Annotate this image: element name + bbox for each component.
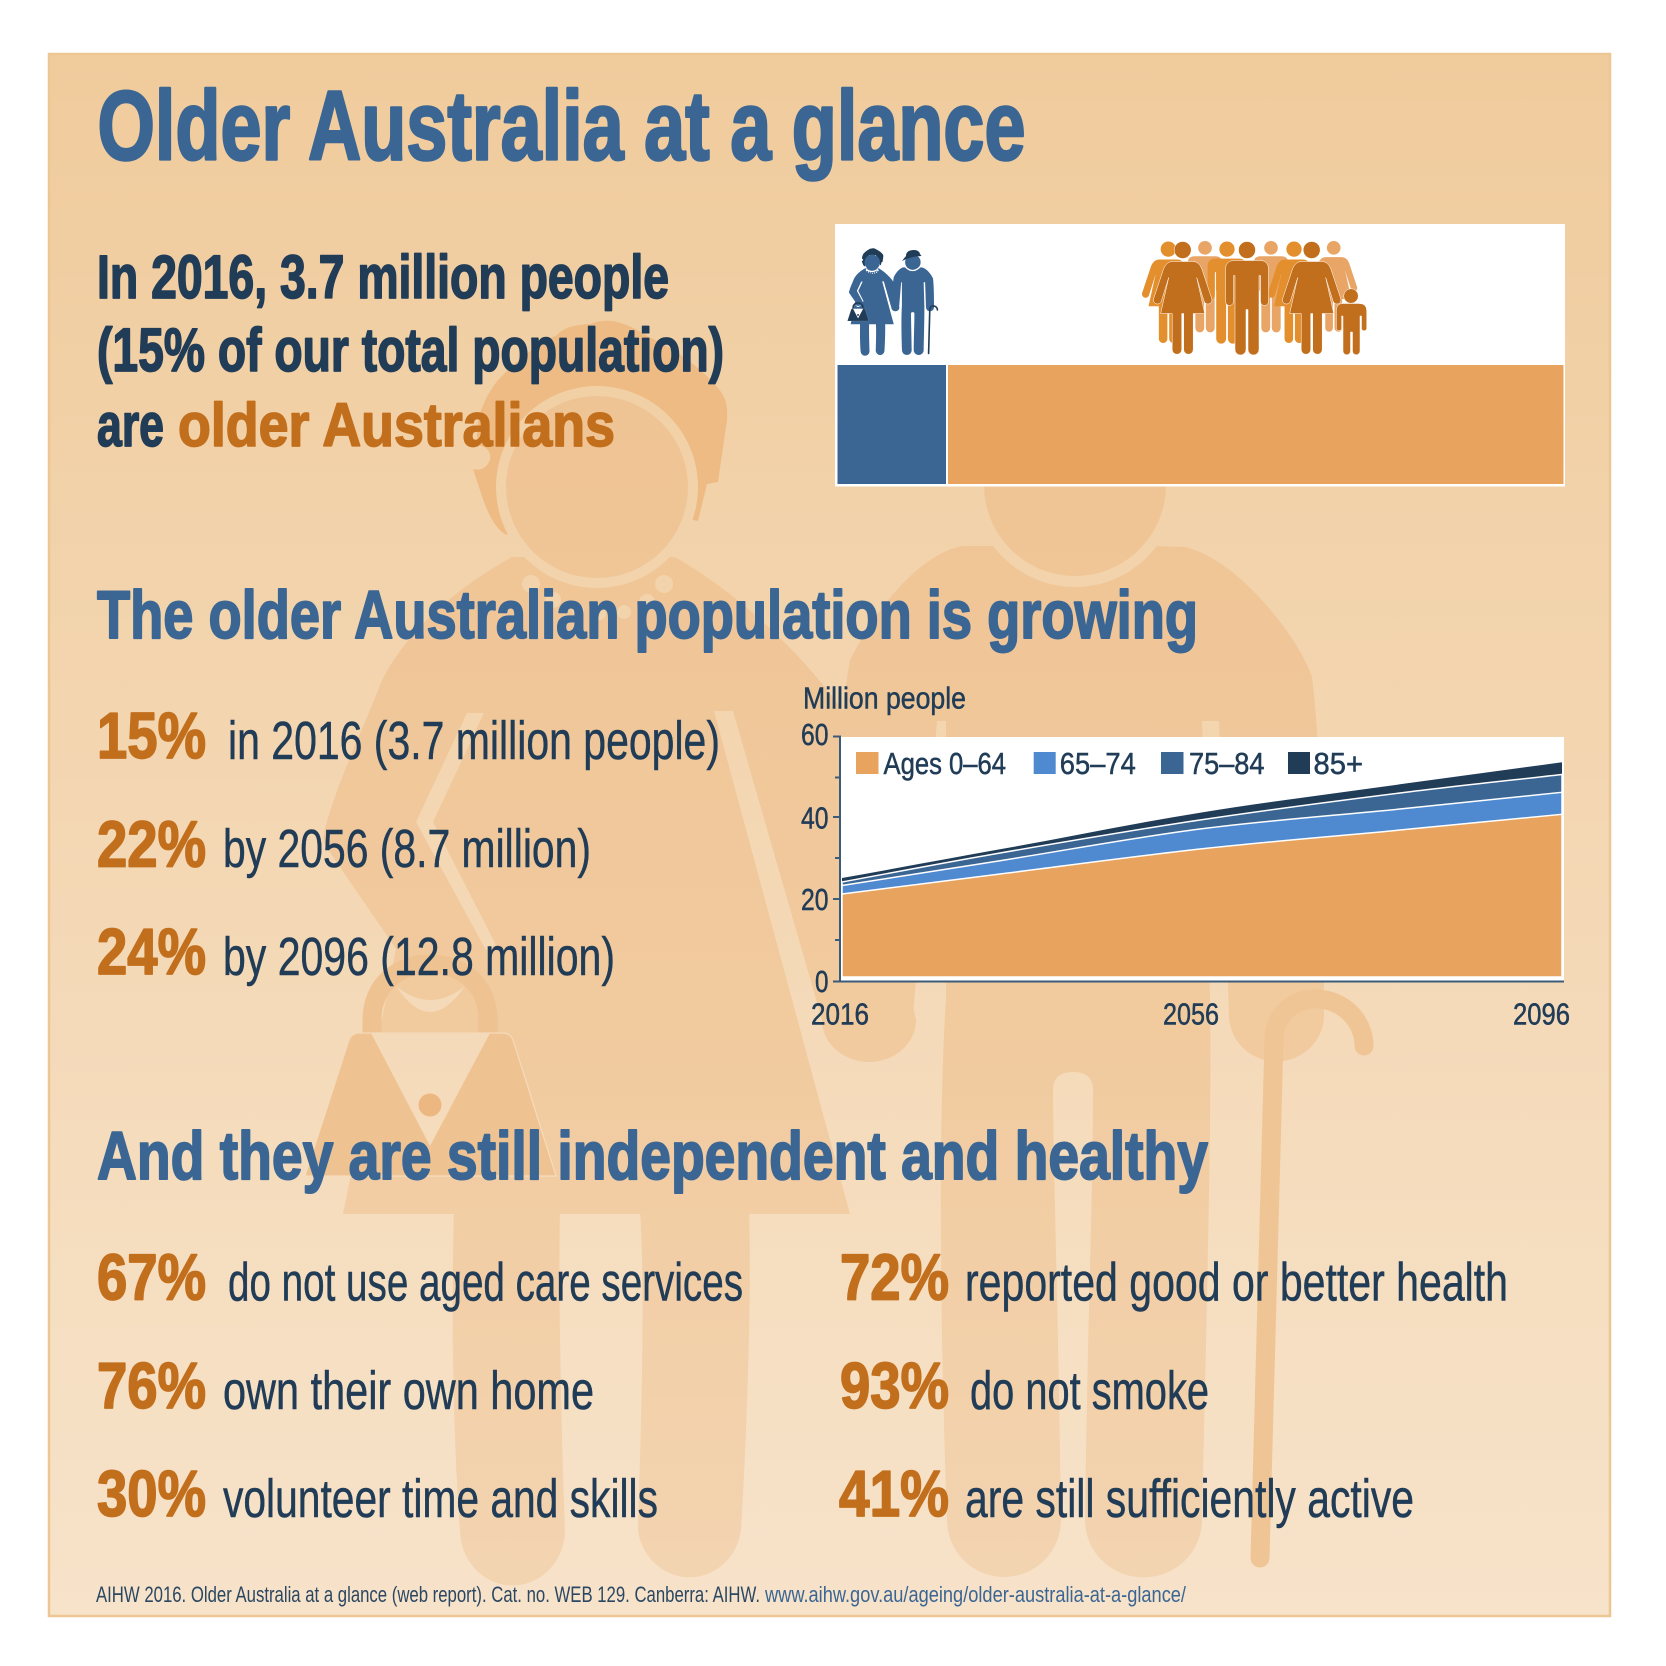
woman hair: [473, 321, 727, 535]
stat 22%: by 2056 (8.7 million): [223, 819, 591, 879]
stat 30%: 30%: [97, 1457, 206, 1530]
y-axis labels: 0: [815, 964, 828, 999]
man body: [833, 546, 1324, 1577]
stat 41%: [839, 1457, 1414, 1530]
woman head: [506, 396, 688, 578]
stat 72%: 72%: [840, 1240, 949, 1314]
stat 93%: do not smoke: [970, 1361, 1209, 1421]
growth statistics: [97, 699, 720, 988]
chart legend: Ages 0–64: [884, 746, 1006, 781]
stat 67%: do not use aged care services: [228, 1252, 743, 1312]
stat 24%: 24%: [97, 915, 206, 988]
chart plot background: [840, 737, 1564, 981]
stat 76%: own their own home: [223, 1361, 594, 1421]
woman legs: [453, 1210, 750, 1586]
y-axis labels: 20: [801, 882, 828, 917]
necklace beads: [522, 575, 673, 620]
handbag inner crescent: [396, 986, 465, 1012]
x-axis labels: 2016: [811, 996, 869, 1032]
chart legend: [856, 746, 1363, 781]
background silhouette: older couple: [305, 321, 1364, 1586]
stat 22%: [97, 808, 591, 880]
stat 67%: [97, 1240, 743, 1314]
stat 93%: [840, 1349, 1209, 1422]
heading: independent and healthy: And they are still independent and healthy: [97, 1118, 1208, 1194]
stat 76%: 76%: [97, 1349, 206, 1422]
older Australians bar: [838, 365, 946, 484]
stat 41%: 41%: [839, 1457, 949, 1530]
stat 30%: volunteer time and skills: [223, 1469, 658, 1529]
source footer: www.aihw.gov.au/ageing/older-australia-at-a-glance/: [764, 1582, 1187, 1607]
woman neck ring: [496, 386, 698, 588]
intro line 1: In 2016, 3.7 million people: [97, 243, 669, 311]
x-axis labels: 2096: [1513, 996, 1570, 1032]
x-axis labels: 2056: [1163, 996, 1219, 1032]
health statistics, right column: [839, 1240, 1508, 1530]
area: ages 0 to 64: [842, 814, 1562, 977]
stat 24%: by 2096 (12.8 million): [223, 927, 615, 987]
y-axis labels: 60: [801, 717, 828, 752]
woman inner arm gap: [416, 713, 496, 950]
child figure: [1336, 289, 1367, 355]
stat 24%: [97, 915, 615, 988]
man collar ring: [973, 383, 1177, 587]
handbag clasp: [418, 1094, 442, 1116]
intro statement: [97, 243, 724, 459]
icon: crowd of people: [1142, 241, 1367, 355]
handbag: [305, 1033, 556, 1176]
walking cane: [1260, 999, 1364, 1558]
handbag handle: [372, 964, 488, 1036]
woman dress and arm: [324, 557, 916, 1214]
intro line 2: (15% of our total population): [97, 316, 724, 384]
white icon panel: [835, 224, 1565, 486]
y-axis title: Million people: [803, 680, 966, 716]
area: ages 85 plus: [842, 762, 1562, 977]
stat 76%: [97, 1349, 594, 1422]
man head: [984, 394, 1166, 576]
stat 15%: in 2016 (3.7 million people): [228, 711, 720, 771]
chart legend: 85+: [1314, 746, 1363, 781]
rest of population bar: [948, 365, 1564, 484]
stat 67%: 67%: [97, 1240, 206, 1314]
chart legend: 65–74: [1060, 746, 1136, 781]
stat 72%: reported good or better health: [965, 1252, 1508, 1312]
independence statistics, left column: [97, 1240, 743, 1530]
chart legend: 75–84: [1189, 746, 1264, 781]
title: Older Australia at a glance: [98, 70, 1026, 180]
y-axis labels: 40: [801, 800, 828, 836]
area: ages 65 to 74: [842, 792, 1562, 977]
handbag flap: [371, 1033, 490, 1146]
man hat: [902, 250, 922, 261]
stat 41%: are still sufficiently active: [965, 1469, 1414, 1529]
intro line 3: are: [97, 391, 164, 459]
stat 22%: 22%: [97, 808, 206, 880]
collars: [866, 267, 920, 272]
y-axis labels: [801, 717, 828, 999]
area: ages 75 to 84: [842, 774, 1562, 977]
axes: [833, 736, 1564, 982]
heading: population growing: The older Australian population is growing: [97, 577, 1198, 653]
area chart: population projection: [801, 680, 1570, 1032]
stat 72%: [840, 1240, 1508, 1314]
stat 15%: 15%: [97, 699, 206, 772]
source footer: AIHW 2016. Older Australia at a glance (web report). Cat. no. WEB 129. Canberra: AIHW.: [96, 1582, 760, 1607]
stat 15%: [97, 699, 720, 772]
icon: older couple: [847, 248, 937, 356]
x-axis labels: [811, 996, 1570, 1032]
intro highlight: older Australians: [178, 391, 615, 459]
stat 30%: [97, 1457, 658, 1530]
population proportion graphic: [835, 224, 1565, 486]
stat 93%: 93%: [840, 1349, 949, 1422]
